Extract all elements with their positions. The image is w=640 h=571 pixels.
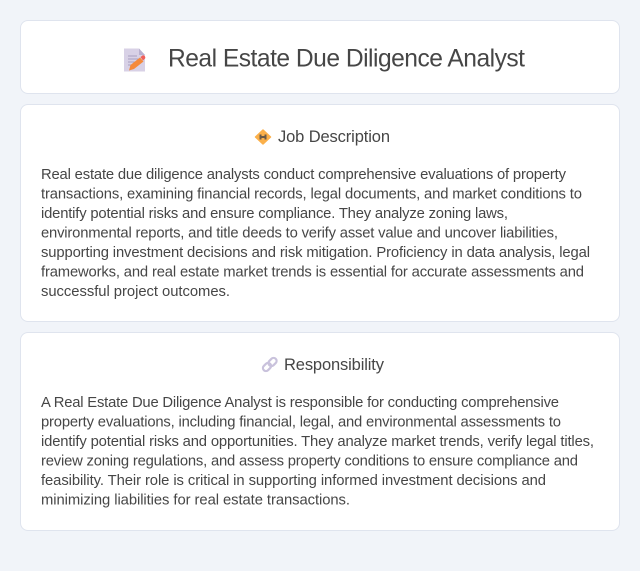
text: responsibility body: identify potential risks and opportunities. They analyze market trends, verify legal titles,: [41, 434, 594, 450]
heading: job description: Job Description: [278, 128, 390, 146]
text: responsibility body: [41, 395, 594, 508]
heading: responsibility: Responsibility: [284, 356, 385, 374]
icon: document with pencil: [124, 48, 145, 72]
icon: chain link: [262, 357, 278, 372]
panel: job description: [20, 104, 620, 322]
icon: orange diamond sign: [256, 130, 270, 144]
text: job description body: successful project outcomes.: [41, 284, 230, 300]
title: Real Estate Due Diligence Analyst: [168, 46, 525, 72]
text: job description body: frameworks, and real estate market trends is essential for accurate assessments and: [41, 264, 584, 280]
text: job description body: identify potential risks and ensure compliance. They analyze zoning laws,: [41, 206, 508, 222]
text: job description body: [41, 167, 590, 300]
panel: responsibility: [20, 332, 620, 531]
text: job description body: supporting investment decisions and risk mitigation. Proficiency in data analysis, legal: [41, 245, 590, 261]
text: job description body: transactions, examining financial records, legal documents, and market conditions to: [41, 186, 582, 202]
text: job description body: Real estate due diligence analysts conduct comprehensive evaluations of property: [41, 167, 567, 183]
text: responsibility body: minimizing liabilities for real estate transactions.: [41, 492, 350, 508]
text: responsibility body: A Real Estate Due Diligence Analyst is responsible for conducting comprehensive: [41, 395, 559, 411]
text: job description body: environmental reports, and title deeds to verify asset value and uncover liabilities,: [41, 226, 558, 242]
text: responsibility body: property evaluations, including financial, legal, and environmental assessments to: [41, 414, 561, 430]
text: responsibility body: review zoning regulations, and assess property conditions to ensure compliance and: [41, 454, 578, 470]
panel: title header: [20, 20, 620, 94]
text: responsibility body: feasibility. Their role is critical in supporting informed investment decisions and: [41, 473, 546, 489]
